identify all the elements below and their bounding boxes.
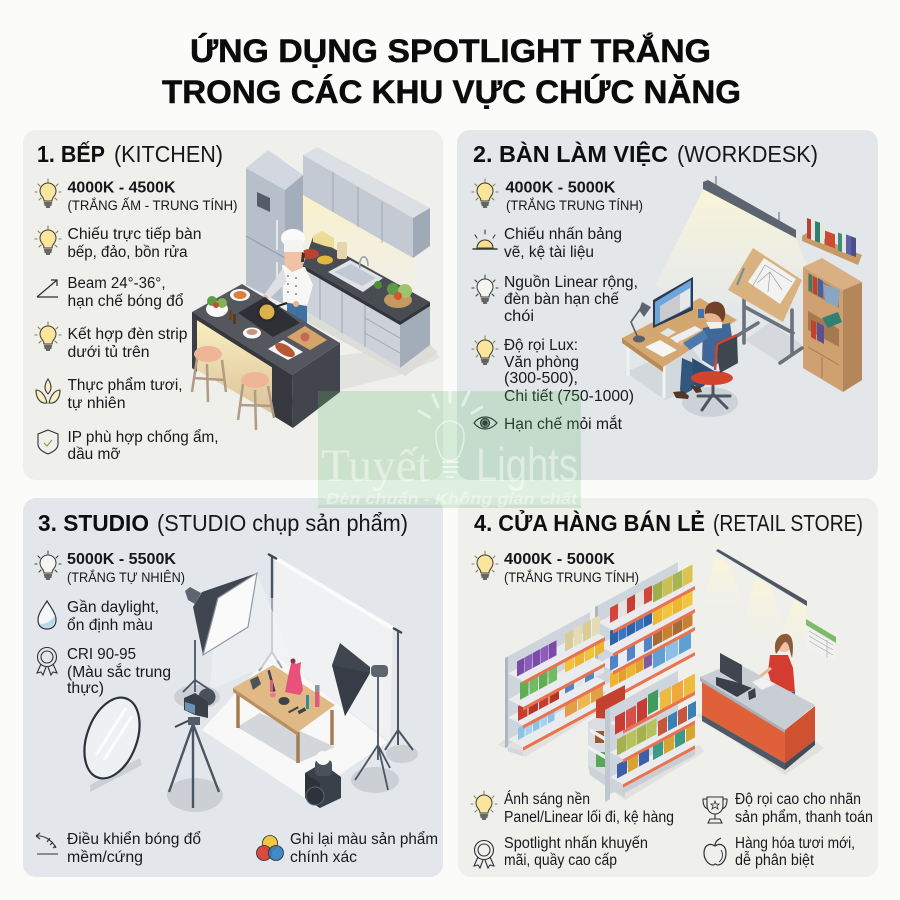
panel: studio xyxy=(23,498,443,877)
illustration: retail scene xyxy=(498,549,836,804)
ceiling light and beams xyxy=(700,549,815,650)
heading: retail xyxy=(474,508,863,536)
cashier xyxy=(757,634,795,702)
sink xyxy=(328,257,383,292)
illustration: kitchen scene xyxy=(192,147,440,430)
heading: studio xyxy=(38,510,408,536)
icon: colour circles xyxy=(256,836,284,860)
title: TRONG CÁC KHU VỰC CHỨC NĂNG xyxy=(162,74,741,110)
icon: bulb xyxy=(35,179,61,207)
icon: bulb strip xyxy=(35,322,61,350)
speedlight box xyxy=(305,751,341,808)
kitchen text list: dầu mỡ xyxy=(68,446,120,463)
heading: studio: 3. STUDIO xyxy=(38,510,149,536)
kitchen text list: bếp, đảo, bồn rửa xyxy=(68,244,188,261)
fridge xyxy=(246,150,303,305)
icon: leaves xyxy=(36,379,60,403)
retail text list: dễ phân biệt xyxy=(735,852,815,869)
watermark: Tuyết Lights: Lights xyxy=(476,438,578,491)
person on chair xyxy=(673,302,738,417)
base cabinets xyxy=(300,263,438,376)
left shelf gondola xyxy=(505,604,605,766)
kitchen text list: Beam 24°-36°, xyxy=(68,275,166,292)
floor shadow xyxy=(300,345,440,400)
kitchen text list: Chiếu trực tiếp bàn xyxy=(68,226,202,243)
heading: kitchen: (KITCHEN) xyxy=(114,141,223,167)
workdesk text list: Văn phòng xyxy=(504,354,579,371)
kitchen text list xyxy=(68,180,238,463)
workdesk text list: Hạn chế mỏi mắt xyxy=(504,416,623,433)
retail text list: (TRẮNG TRUNG TÍNH) xyxy=(504,570,639,585)
icon: rosette xyxy=(474,840,494,868)
heading: kitchen: 1. BẾP xyxy=(37,140,105,167)
panel: workdesk xyxy=(457,130,878,480)
icon: rosette xyxy=(37,648,57,675)
kitchen text list: (TRẮNG ẤM - TRUNG TÍNH) xyxy=(68,198,238,213)
retail text list: 4000K - 5000K xyxy=(504,551,616,568)
studio text list: (Màu sắc trung xyxy=(67,664,171,681)
studio text list: ổn định màu xyxy=(67,617,153,634)
heading: studio: (STUDIO chụp sản phẩm) xyxy=(157,510,408,536)
workdesk text list: Nguồn Linear rộng, xyxy=(504,274,638,291)
upper cabinets xyxy=(303,147,430,258)
workdesk text list: 4000K - 5000K xyxy=(506,180,616,196)
retail text list xyxy=(504,551,873,869)
studio text list: mềm/cứng xyxy=(67,849,143,866)
stools xyxy=(192,346,274,430)
right softbox xyxy=(332,643,399,793)
illustration: workdesk scene xyxy=(622,176,862,417)
icon: trophy xyxy=(703,797,727,823)
icon: shield xyxy=(38,430,58,454)
panel: retail store xyxy=(458,498,878,877)
workdesk text list: Chiếu nhấn bảng xyxy=(504,226,622,243)
workdesk text list: đèn bàn hạn chế xyxy=(504,291,619,308)
icon: eye xyxy=(474,417,497,429)
kitchen text list: hạn chế bóng đổ xyxy=(68,293,184,310)
kitchen text list: 4000K - 4500K xyxy=(68,180,176,196)
heading: kitchen xyxy=(37,140,223,167)
chef xyxy=(262,229,313,326)
illustration: studio scene xyxy=(74,554,418,812)
workdesk text list: vẽ, kệ tài liệu xyxy=(504,244,594,261)
workdesk text list: (300-500), xyxy=(504,370,578,387)
icon: ambient bulb xyxy=(471,791,497,819)
kitchen text list: Kết hợp đèn strip xyxy=(68,326,188,343)
checkout counter xyxy=(700,653,815,770)
watermark wordmark: Tuyết xyxy=(321,440,430,492)
workdesk text list: chói xyxy=(504,308,534,325)
retail text list: sản phẩm, thanh toán xyxy=(735,809,873,826)
retail text list: Spotlight nhấn khuyến xyxy=(504,835,648,852)
desk xyxy=(622,277,737,400)
icon: outline bulb xyxy=(472,275,498,303)
icon: shadow control xyxy=(36,833,58,854)
workdesk text list: (TRẮNG TRUNG TÍNH) xyxy=(506,198,643,213)
studio text list: 5000K - 5500K xyxy=(67,551,177,568)
watermark: Tuyết Lights xyxy=(318,391,581,508)
icon: lux bulb xyxy=(472,336,498,364)
wall chart xyxy=(806,619,836,663)
icon: daylight bulb xyxy=(35,551,61,579)
kitchen text list: tự nhiên xyxy=(68,395,126,412)
left softbox xyxy=(174,573,290,709)
studio text list: Ghi lại màu sản phẩm xyxy=(290,831,438,848)
island xyxy=(192,284,340,428)
back shelf gondola xyxy=(595,553,695,710)
studio text list xyxy=(67,551,438,866)
workdesk text list: Chi tiết (750-1000) xyxy=(504,388,634,405)
mirror reflector xyxy=(74,690,150,792)
kitchen text list: Thực phẩm tươi, xyxy=(68,377,182,394)
retail text list: Panel/Linear lối đi, kệ hàng xyxy=(504,809,674,826)
heading: workdesk: (WORKDESK) xyxy=(677,141,818,167)
heading: workdesk xyxy=(473,140,818,167)
front shelf gondola xyxy=(588,661,696,804)
icon: half sun xyxy=(473,230,497,249)
retail text list: Hàng hóa tươi mới, xyxy=(735,835,855,852)
workdesk text list xyxy=(504,180,643,433)
camera on tripod xyxy=(167,688,223,812)
retail text list: Độ rọi cao cho nhãn xyxy=(735,791,861,808)
backsplash glow xyxy=(303,190,415,292)
studio text list: (TRẮNG TỰ NHIÊN) xyxy=(67,570,185,585)
watermark bulb xyxy=(419,391,482,477)
icon: bulb xyxy=(472,179,498,207)
icon: bulb xyxy=(472,551,498,579)
counter items xyxy=(301,231,412,308)
studio text list: Điều khiển bóng đổ xyxy=(67,831,201,848)
studio text list: Gần daylight, xyxy=(67,599,159,616)
icon: water drop xyxy=(38,601,56,629)
floor shadows xyxy=(498,690,824,800)
retail text list: Ánh sáng nền xyxy=(504,791,590,808)
heading: retail: 4. CỬA HÀNG BÁN LẺ xyxy=(474,508,705,536)
drafting table xyxy=(728,248,802,363)
workdesk text list: Độ rọi Lux: xyxy=(504,337,578,354)
bookcase xyxy=(803,258,862,392)
light beam xyxy=(655,188,808,310)
heading: retail: (RETAIL STORE) xyxy=(713,510,863,536)
studio text list: thực) xyxy=(67,680,104,697)
title: ỨNG DỤNG SPOTLIGHT TRẮNG xyxy=(190,33,711,69)
title xyxy=(162,33,741,110)
table with products xyxy=(233,658,335,763)
kitchen text list: IP phù hợp chống ẩm, xyxy=(68,429,218,446)
watermark tagline: Đèn chuẩn - Không gian chất xyxy=(326,490,578,508)
counter top xyxy=(303,237,430,321)
retail text list: mãi, quầy cao cấp xyxy=(504,852,617,869)
kitchen text list: dưới tủ trên xyxy=(68,344,150,361)
icon: bulb direct xyxy=(35,226,61,254)
heading: workdesk: 2. BÀN LÀM VIỆC xyxy=(473,140,668,167)
icon: beam angle xyxy=(37,280,58,297)
backdrop and floor xyxy=(202,554,418,798)
studio text list: chính xác xyxy=(290,849,357,866)
panel: kitchen xyxy=(23,130,443,480)
studio text list: CRI 90-95 xyxy=(67,646,136,663)
icon: apple xyxy=(704,838,726,865)
linear light xyxy=(703,176,796,238)
wall shelf with books xyxy=(802,217,862,265)
